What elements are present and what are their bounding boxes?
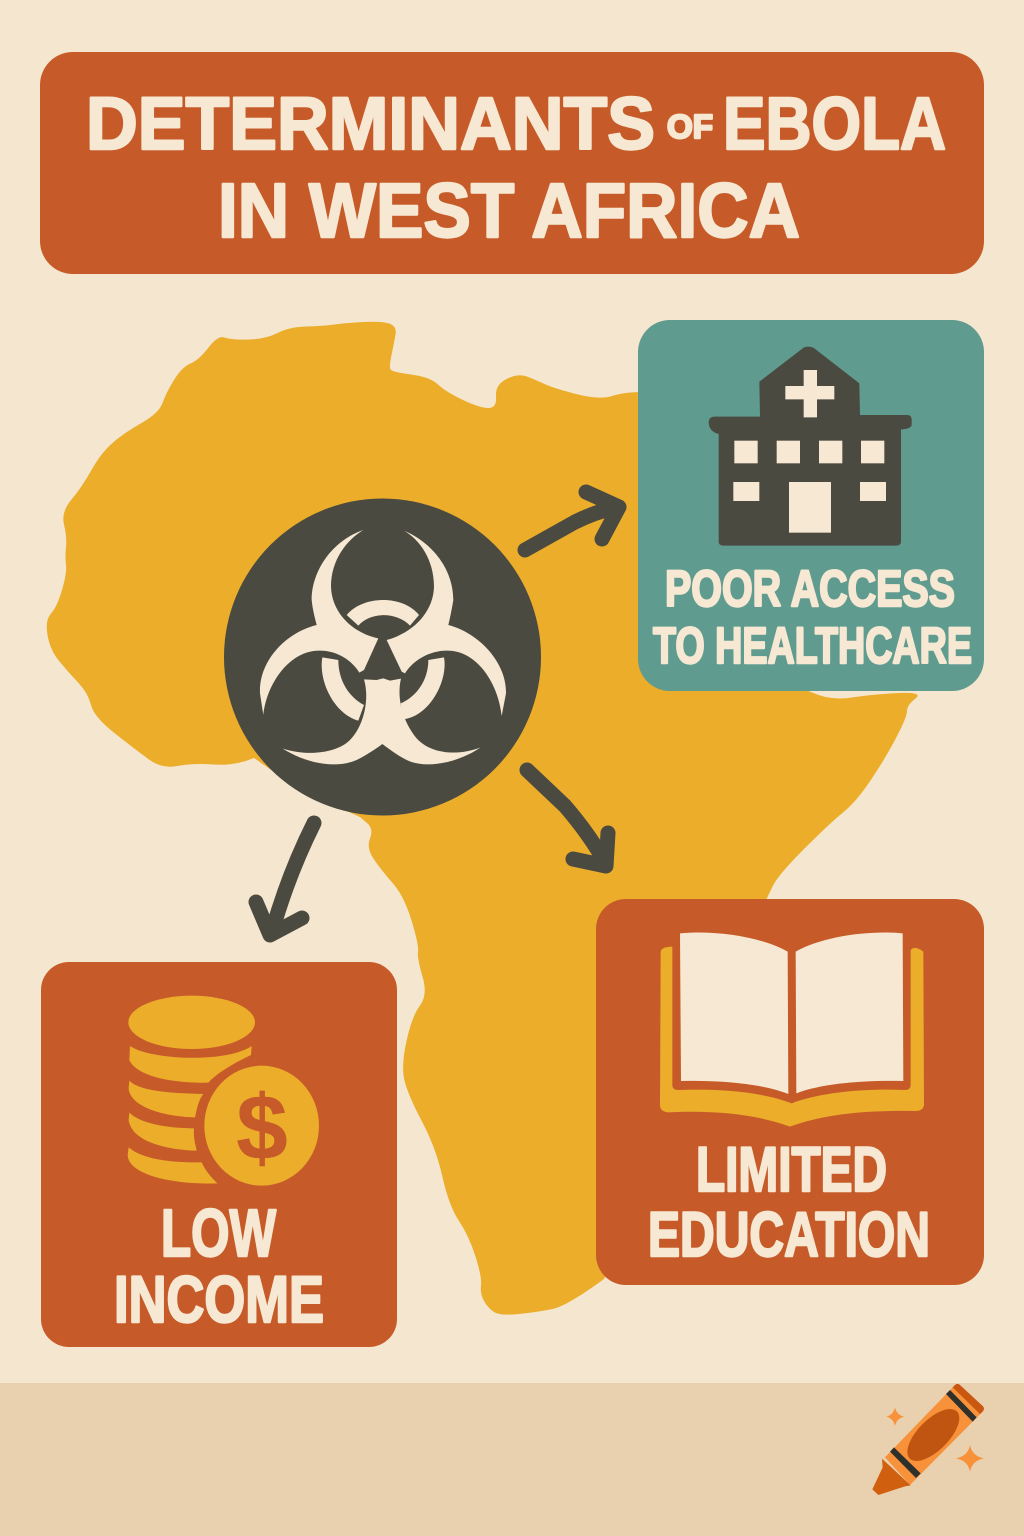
icon: hospital xyxy=(709,347,912,546)
title banner: IN WEST AFRICA xyxy=(218,168,800,254)
map of Africa xyxy=(47,322,918,1315)
label: limited education xyxy=(648,1135,930,1270)
panel: limited education xyxy=(596,899,984,1285)
label: low income: INCOME xyxy=(114,1262,324,1336)
icon: coin stack xyxy=(128,996,319,1186)
panel: poor access to healthcare xyxy=(638,320,984,691)
label: poor access to healthcare xyxy=(653,560,972,674)
icon: coin stack: $ xyxy=(236,1077,288,1179)
biohazard emblem xyxy=(224,498,541,816)
title banner xyxy=(40,52,984,274)
label: limited education: LIMITED xyxy=(696,1135,887,1205)
icon: open book xyxy=(660,932,924,1127)
arrow to healthcare xyxy=(525,492,619,550)
title banner: OF xyxy=(667,108,713,145)
label: limited education: EDUCATION xyxy=(648,1200,930,1270)
icon: crayon logo xyxy=(872,1384,984,1495)
title banner: DETERMINANTS xyxy=(86,82,655,165)
arrow to education xyxy=(527,770,608,866)
label: low income: LOW xyxy=(161,1196,277,1271)
footer band xyxy=(0,1383,1024,1536)
label: low income xyxy=(114,1196,324,1336)
arrow to income xyxy=(256,823,314,935)
title banner: EBOLA xyxy=(723,82,946,165)
panel: low income xyxy=(41,962,397,1347)
